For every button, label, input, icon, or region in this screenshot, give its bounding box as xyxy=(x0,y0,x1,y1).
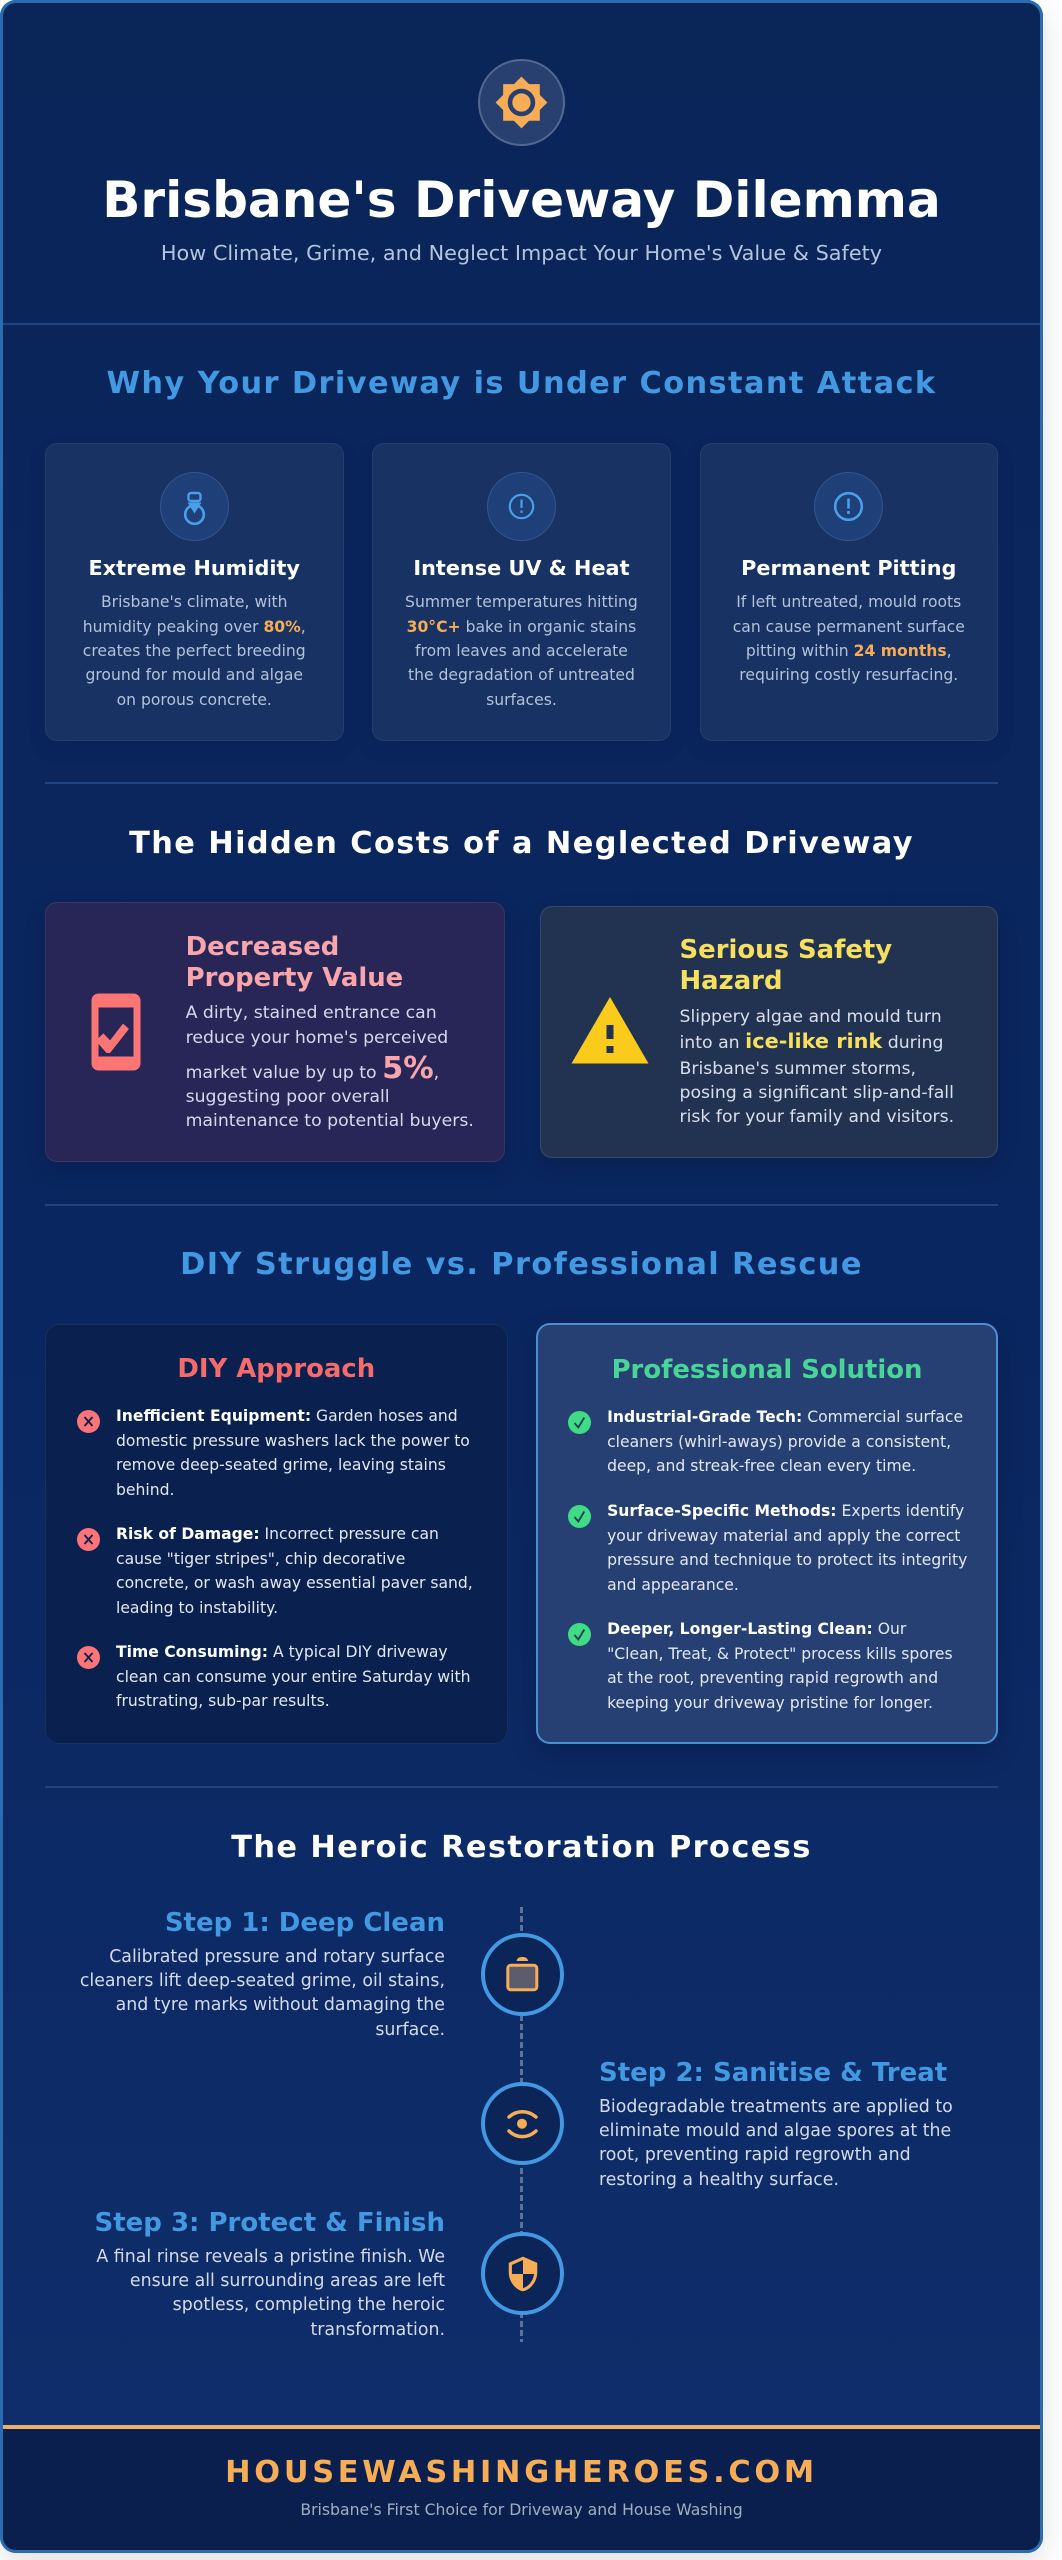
panel: DIY approach xyxy=(45,1324,508,1744)
list item: time consuming xyxy=(77,1643,470,1710)
item text: Time Consuming: A typical DIY driveway xyxy=(116,1643,448,1661)
card text: ground for mould and algae xyxy=(85,666,303,684)
card title: Permanent Pitting xyxy=(741,556,956,580)
item text: pressure and technique to protect its integrity xyxy=(607,1551,967,1569)
card text: pitting within 24 months, xyxy=(746,642,952,660)
item text: cleaners (whirl-aways) provide a consistent, xyxy=(607,1433,951,1451)
card text: can cause permanent surface xyxy=(733,618,965,636)
panel: extreme humidity xyxy=(45,443,344,741)
icon: check xyxy=(568,1505,591,1528)
card text xyxy=(83,593,306,709)
title: Brisbane's Driveway Dilemma xyxy=(102,170,941,229)
icon: cross xyxy=(77,1410,100,1433)
step 3 text xyxy=(94,2208,445,2340)
icon: cross xyxy=(77,1528,100,1551)
item text: frustrating, sub-par results. xyxy=(116,1692,330,1710)
icon: warning triangle xyxy=(572,997,648,1064)
footer xyxy=(3,2425,1040,2550)
cost text: market value by up to 5%, xyxy=(186,1051,439,1086)
item text xyxy=(116,1643,470,1710)
footer brand: HOUSEWASHINGHEROES.COM xyxy=(225,2454,818,2490)
step title: Step 2: Sanitise & Treat xyxy=(599,2058,947,2088)
icon: check xyxy=(568,1623,591,1646)
timeline dashed line xyxy=(520,1907,523,2342)
item text: "Clean, Treat, & Protect" process kills spores xyxy=(607,1645,953,1663)
card text: If left untreated, mould roots xyxy=(736,593,961,611)
step body: A final rinse reveals a pristine finish. We xyxy=(96,2246,445,2266)
item text: domestic pressure washers lack the power to xyxy=(116,1432,470,1450)
cost title: Serious Safety xyxy=(680,935,892,965)
icon: phone with check xyxy=(92,994,140,1070)
item text: clean can consume your entire Saturday with xyxy=(116,1668,470,1686)
card text: the degradation of untreated xyxy=(408,666,635,684)
cost text: Brisbane's summer storms, xyxy=(680,1059,916,1079)
step body: ensure all surrounding areas are left xyxy=(130,2271,445,2291)
cost text: posing a significant slip-and-fall xyxy=(680,1083,954,1103)
item text: Industrial-Grade Tech: Commercial surface xyxy=(607,1408,963,1426)
icon: check xyxy=(568,1411,591,1434)
cost text: A dirty, stained entrance can xyxy=(186,1003,437,1023)
heading: DIY vs professional: DIY Struggle vs. Professional Rescue xyxy=(180,1247,863,1282)
item text: your driveway material and apply the correct xyxy=(607,1527,960,1545)
step body xyxy=(80,1946,445,2040)
header xyxy=(102,59,941,265)
step body: surface. xyxy=(375,2020,445,2040)
card text: humidity peaking over 80%, xyxy=(83,618,306,636)
item text xyxy=(116,1407,470,1499)
item text: keeping your driveway pristine for longer. xyxy=(607,1694,933,1712)
icon: step 1 machine xyxy=(481,1932,564,2016)
DIY title: DIY Approach xyxy=(177,1354,375,1384)
item text: and appearance. xyxy=(607,1576,739,1594)
item text xyxy=(607,1620,953,1712)
cost text: Slippery algae and mould turn xyxy=(680,1007,942,1027)
card title: Intense UV & Heat xyxy=(413,556,630,580)
icon: humidity xyxy=(160,472,229,540)
cost title xyxy=(186,932,403,993)
step title: Step 3: Protect & Finish xyxy=(94,2208,445,2238)
professional title: Professional Solution xyxy=(612,1354,922,1384)
item text: Surface-Specific Methods: Experts identify xyxy=(607,1502,964,1520)
card text: from leaves and accelerate xyxy=(415,642,628,660)
icon: alert large xyxy=(814,472,883,540)
panel: decreased property value xyxy=(45,902,505,1162)
step body xyxy=(599,2096,953,2190)
card text: Brisbane's climate, with xyxy=(101,593,288,611)
icon: sun badge xyxy=(478,59,565,146)
item text: remove deep-seated grime, leaving stains xyxy=(116,1456,446,1474)
cost text: reduce your home's perceived xyxy=(186,1028,448,1048)
panel: intense UV and heat xyxy=(372,443,671,741)
heading: restoration process: The Heroic Restoration Process xyxy=(231,1830,812,1865)
step body: cleaners lift deep-seated grime, oil stains, xyxy=(80,1971,445,1991)
item text: at the root, preventing rapid regrowth and xyxy=(607,1669,938,1687)
item text: behind. xyxy=(116,1481,174,1499)
item text: Risk of Damage: Incorrect pressure can xyxy=(116,1525,439,1543)
step body: transformation. xyxy=(310,2320,445,2340)
cost title: Hazard xyxy=(680,966,782,996)
card text: creates the perfect breeding xyxy=(83,642,306,660)
icon: step 2 treatment xyxy=(481,2082,564,2165)
card text xyxy=(733,593,965,684)
cost text: into an ice-like rink during xyxy=(680,1029,943,1053)
item text xyxy=(607,1502,967,1594)
icon: alert small xyxy=(487,472,556,540)
heading: why your driveway is under attack: Why Your Driveway is Under Constant Attack xyxy=(106,366,937,401)
item text: leading to instability. xyxy=(116,1599,278,1617)
item text: cause "tiger stripes", chip decorative xyxy=(116,1550,405,1568)
icon: cross xyxy=(77,1646,100,1669)
step body: Calibrated pressure and rotary surface xyxy=(109,1946,445,1966)
cost text xyxy=(186,1003,474,1131)
panel: professional solution xyxy=(536,1323,998,1744)
step title: Step 1: Deep Clean xyxy=(165,1908,445,1938)
cost title xyxy=(680,935,892,996)
heading: hidden costs: The Hidden Costs of a Neglected Driveway xyxy=(129,826,914,861)
item text: concrete, or wash away essential paver sand, xyxy=(116,1574,473,1592)
step body: root, preventing rapid regrowth and xyxy=(599,2145,911,2165)
item text xyxy=(116,1525,473,1617)
cost text: suggesting poor overall xyxy=(186,1087,390,1107)
step body: and tyre marks without damaging the xyxy=(116,1995,445,2015)
cost title: Property Value xyxy=(186,963,403,993)
card text: surfaces. xyxy=(486,691,557,709)
cost text xyxy=(680,1007,954,1127)
footer tagline: Brisbane's First Choice for Driveway and House Washing xyxy=(300,2500,743,2519)
list item: risk of damage xyxy=(77,1525,473,1617)
card text: on porous concrete. xyxy=(117,691,272,709)
cost title: Decreased xyxy=(186,932,339,962)
icon: step 3 shield xyxy=(481,2232,564,2315)
subtitle: How Climate, Grime, and Neglect Impact Your Home's Value & Safety xyxy=(161,241,882,265)
panel: serious safety hazard xyxy=(540,906,998,1158)
card text: 30°C+ bake in organic stains xyxy=(407,618,636,636)
item text xyxy=(607,1408,963,1475)
cost text: maintenance to potential buyers. xyxy=(186,1111,474,1131)
step body: restoring a healthy surface. xyxy=(599,2170,839,2190)
step 1 text xyxy=(80,1908,445,2040)
step body xyxy=(96,2246,445,2340)
item text: Deeper, Longer-Lasting Clean: Our xyxy=(607,1620,906,1638)
cost text: risk for your family and visitors. xyxy=(680,1107,954,1127)
card text xyxy=(405,593,638,709)
step 2 text xyxy=(599,2058,953,2190)
step body: Biodegradable treatments are applied to xyxy=(599,2096,953,2116)
list item: deeper clean xyxy=(568,1620,953,1712)
card text: Summer temperatures hitting xyxy=(405,593,638,611)
list item: inefficient equipment xyxy=(77,1407,470,1499)
panel: permanent pitting xyxy=(700,443,998,741)
list item: industrial-grade tech xyxy=(568,1408,963,1475)
step body: spotless, completing the heroic xyxy=(173,2295,445,2315)
list item: surface-specific methods xyxy=(568,1502,967,1594)
card title: Extreme Humidity xyxy=(89,556,300,580)
item text: Inefficient Equipment: Garden hoses and xyxy=(116,1407,458,1425)
item text: deep, and streak-free clean every time. xyxy=(607,1457,916,1475)
step body: eliminate mould and algae spores at the xyxy=(599,2121,951,2141)
card text: requiring costly resurfacing. xyxy=(739,666,958,684)
